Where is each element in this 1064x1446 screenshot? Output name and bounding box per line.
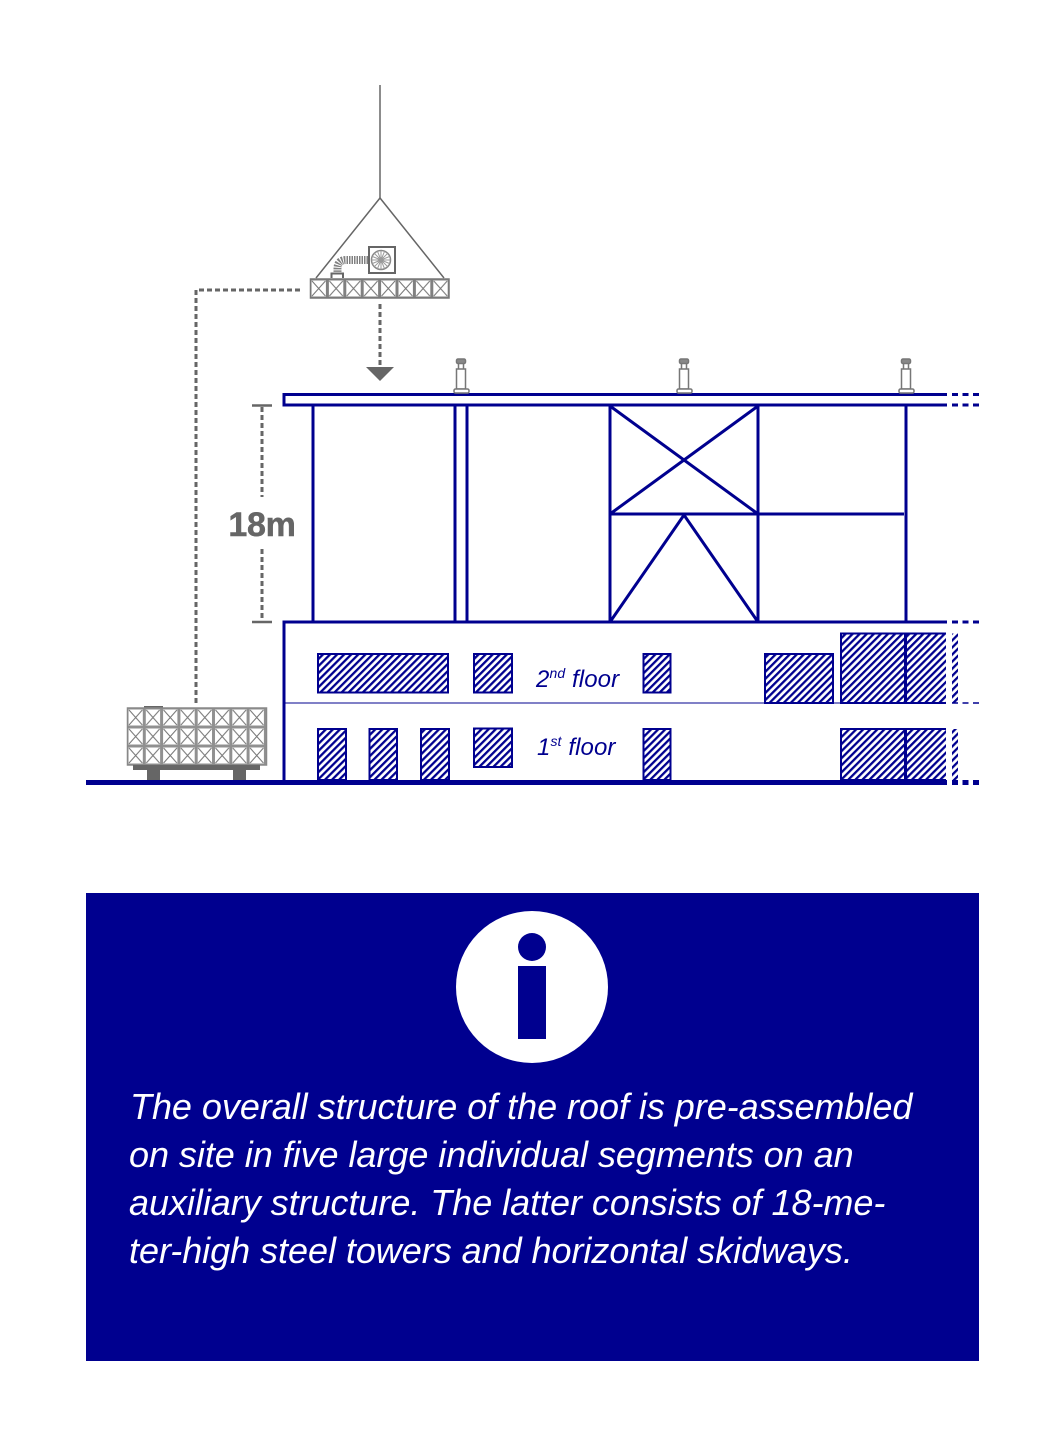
building floors and ground [86,622,979,782]
label: 1st floor: st [550,733,563,749]
info text: ter-high steel towers and horizontal skidways. [129,1230,853,1271]
label: 1st floor: 1 [537,734,550,761]
skidway jacks [454,359,914,393]
dashed path from ground to crane [196,290,300,704]
crane cable [379,85,381,198]
label: 2nd floor: floor [565,666,620,693]
steel tower frame [313,405,906,622]
info text: auxiliary structure. The latter consists of 18-me- [129,1182,885,1223]
roof girder [284,394,979,405]
first floor hatched blocks [318,728,958,780]
crane lifting roof segment [310,85,449,298]
hanging truss segment [310,279,449,298]
lifting slings [316,198,444,278]
info text: The overall structure of the roof is pre-assembled [130,1086,913,1127]
info text: on site in five large individual segments on an [129,1134,854,1175]
icon: information [456,911,608,1063]
height dimension: 18m [228,406,296,622]
stored truss segment on ground [128,706,266,780]
label: 2nd floor: 2 [536,666,549,693]
jack 3 [899,359,914,393]
label: 2nd floor: nd [549,665,566,681]
jack 2 [677,359,692,393]
info panel [86,893,979,1361]
arrow: lowering onto roof [366,304,394,381]
jack 1 [454,359,469,393]
label: 1st floor: floor [562,734,616,761]
dimension label: 18m [228,506,296,544]
air handling unit with fan and duct [332,247,395,278]
second floor hatched blocks [318,634,958,703]
